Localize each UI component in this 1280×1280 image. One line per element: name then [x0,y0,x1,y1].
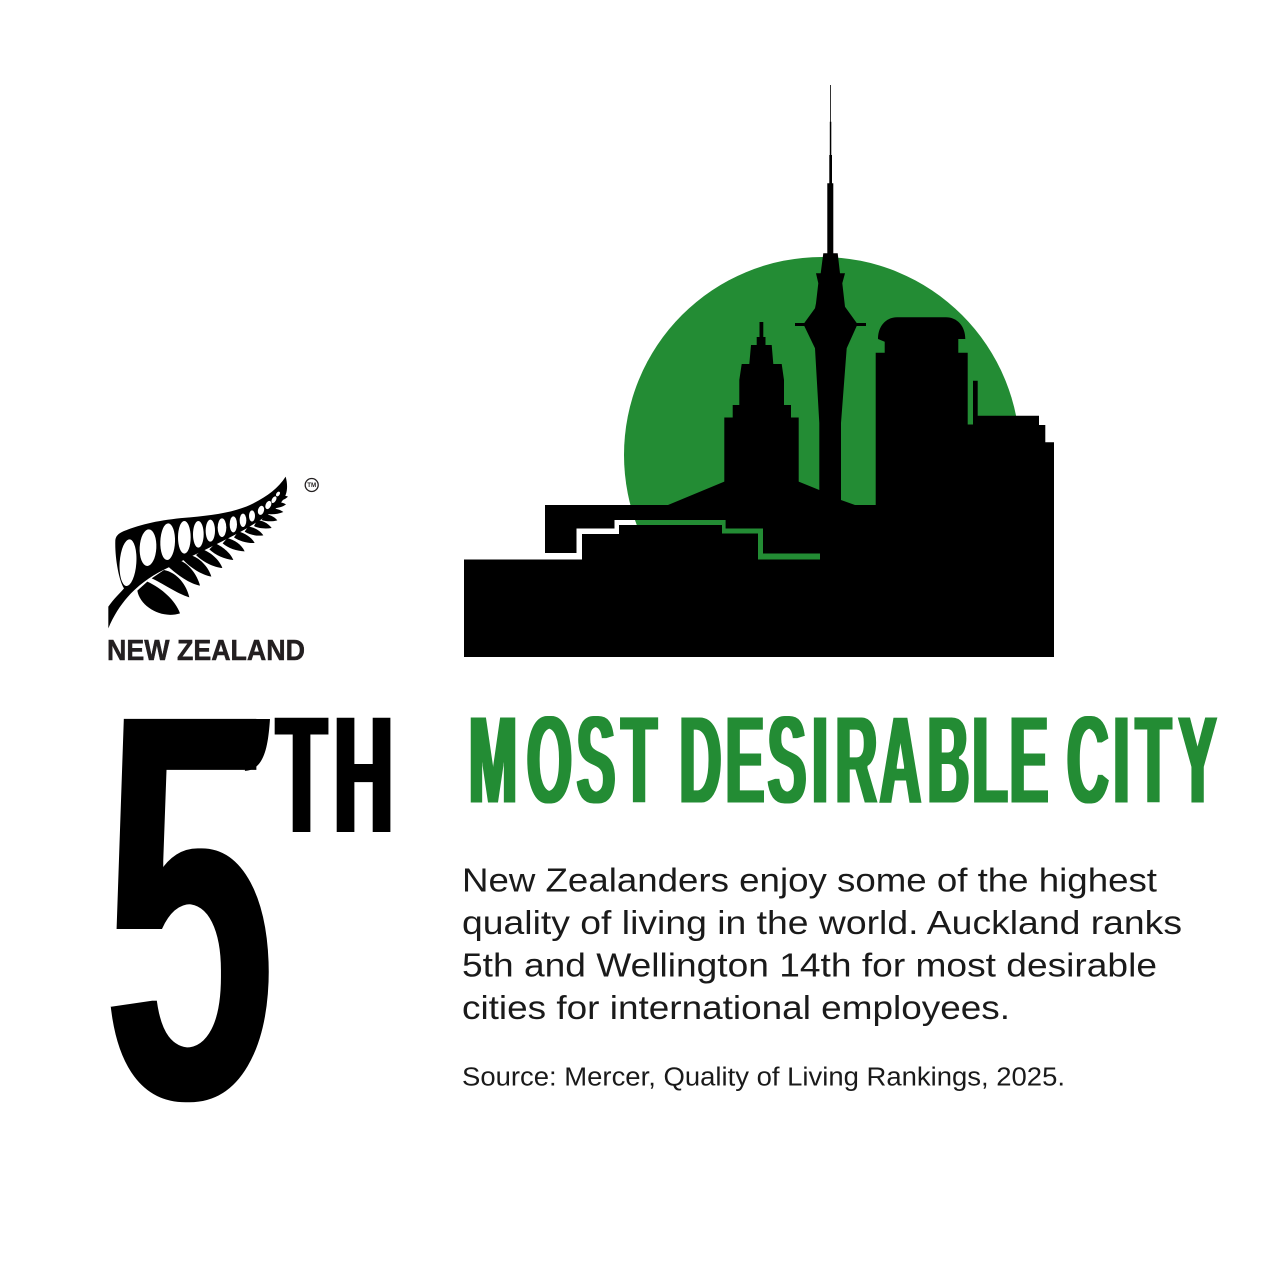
city silhouette with Sky Tower [464,85,1054,657]
body text: cities for international employees. [462,990,1010,1027]
superscript TH: TH [277,681,393,870]
icon: trademark symbol: TM [307,482,316,489]
big ranking: 5TH [103,594,393,1218]
heading: most desirable city [469,689,1217,830]
green sun circle [624,257,1020,653]
body text: 5th and Wellington 14th for most desirable [462,948,1157,984]
body text: quality of living in the world. Auckland ranks [462,905,1182,942]
source note: Source: Mercer, Quality of Living Rankings, 2025. [462,1064,1065,1092]
icon: trademark symbol [305,478,318,492]
logo: New Zealand silver fern [107,477,318,667]
heading: most desirable city: MOST [469,689,657,830]
heading: most desirable city: DESIRABLE [680,689,1048,830]
heading: most desirable city: CITY [1067,689,1217,830]
body text: New Zealanders enjoy some of the highest [462,862,1158,900]
illustration: Auckland skyline [464,85,1054,657]
body text [462,862,1182,1027]
logo wordmark: NEW ZEALAND [107,635,305,667]
numeral 5: 5 [103,594,275,1218]
icon: fern [108,477,288,628]
